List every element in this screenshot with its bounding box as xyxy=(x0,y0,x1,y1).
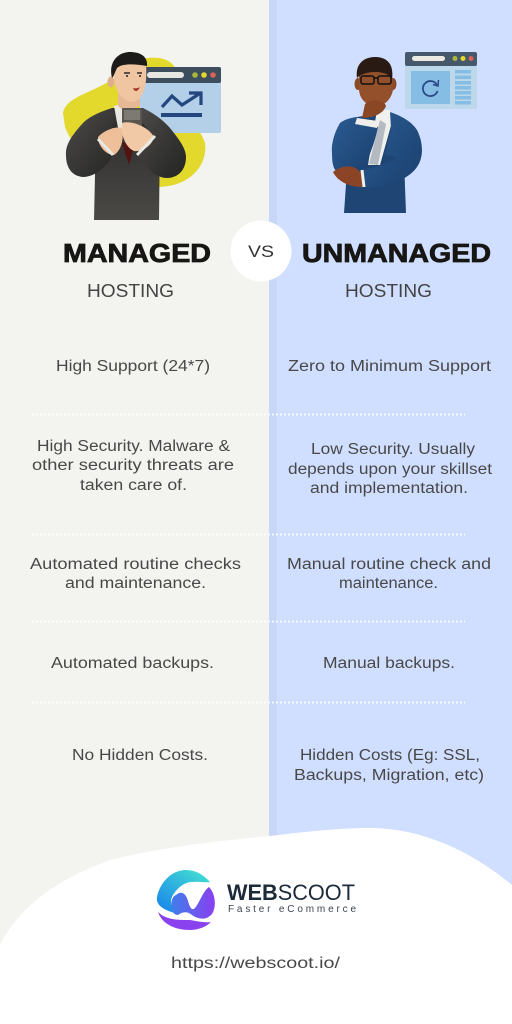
shirt and tie xyxy=(114,103,124,130)
heading: managed: MANAGED xyxy=(63,238,211,268)
icon: chart window xyxy=(140,67,221,133)
torso xyxy=(94,108,160,220)
heading: unmanaged: UNMANAGED xyxy=(302,238,491,268)
row 1 left: High Support (24*7) xyxy=(56,358,210,375)
neck and head xyxy=(118,88,140,112)
badge: vs: VS xyxy=(248,242,274,261)
row 2 left: taken care of. xyxy=(80,477,187,494)
panel: managed background xyxy=(0,0,269,1024)
row 3 right xyxy=(287,556,491,592)
row 3 left xyxy=(30,556,241,592)
row 5 right: Backups, Migration, etc) xyxy=(294,767,484,784)
yellow blob xyxy=(63,58,205,187)
footer: white wave xyxy=(0,828,512,1024)
logo: webscoot wordmark: Faster eCommerce xyxy=(228,904,356,915)
row 3 right: maintenance. xyxy=(339,575,438,592)
row 2 left: other security threats are xyxy=(32,457,234,474)
left arm xyxy=(332,117,378,172)
footer url: https://webscoot.io/ xyxy=(171,955,341,972)
row 4 right: Manual backups. xyxy=(323,655,455,672)
right arm xyxy=(362,112,422,187)
row 4 left: Automated backups. xyxy=(51,655,214,672)
lower hand xyxy=(333,166,363,187)
row 5 right: Hidden Costs (Eg: SSL, xyxy=(300,747,480,764)
row 3 left: Automated routine checks xyxy=(30,556,241,573)
right arm xyxy=(137,108,186,178)
subheading: unmanaged hosting: HOSTING xyxy=(345,281,432,301)
logo: webscoot mark xyxy=(157,870,215,930)
logo: webscoot wordmark: WEBSCOOT xyxy=(227,880,355,905)
badge: vs xyxy=(230,220,292,282)
row 5 right xyxy=(294,747,484,784)
subheading: managed hosting: HOSTING xyxy=(87,281,174,301)
phone xyxy=(122,108,142,128)
row 2 right: and implementation. xyxy=(310,480,468,497)
left arm xyxy=(66,108,120,177)
row 1 right: Zero to Minimum Support xyxy=(288,358,492,375)
thinking hand xyxy=(362,100,386,118)
man xyxy=(332,57,422,213)
row 2 right: depends upon your skillset xyxy=(288,461,493,478)
row 2 left: High Security. Malware & xyxy=(37,438,231,455)
illustration: managed businessman with chart window xyxy=(63,52,221,220)
panel: unmanaged background xyxy=(269,0,512,1024)
hands xyxy=(98,127,123,155)
row 2 left xyxy=(32,438,234,494)
man xyxy=(66,52,186,220)
row 5 left: No Hidden Costs. xyxy=(72,747,208,764)
torso xyxy=(344,112,406,213)
neck and head xyxy=(354,78,362,90)
row 2 right xyxy=(288,441,493,497)
row 2 right: Low Security. Usually xyxy=(311,441,475,458)
shirt and tie xyxy=(368,110,392,165)
illustration: unmanaged thinking man with refresh window xyxy=(332,52,477,213)
row 3 right: Manual routine check and xyxy=(287,556,491,573)
row 3 left: and maintenance. xyxy=(65,575,206,592)
cuff xyxy=(355,118,378,128)
icon: refresh window xyxy=(405,52,477,109)
